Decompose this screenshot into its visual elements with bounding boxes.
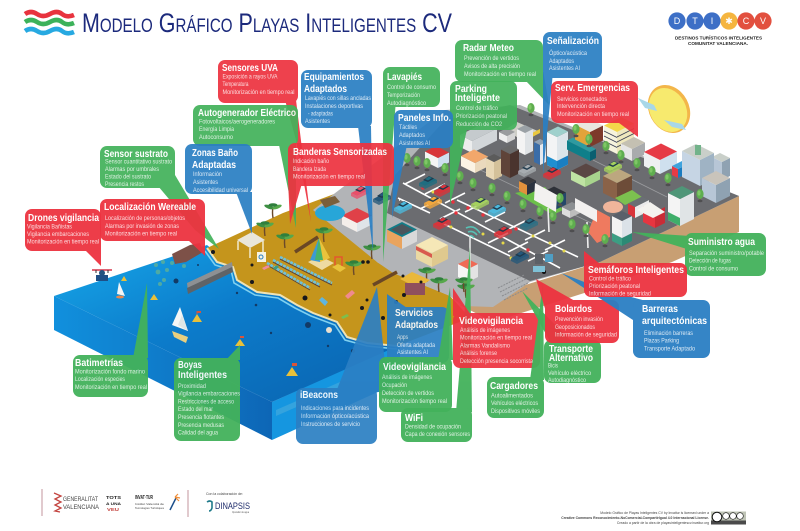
callout: Boyas Inteligentes: Proximidad <box>178 383 206 390</box>
callout: Sensores UVA <box>218 60 311 222</box>
buildings <box>315 117 730 282</box>
callout: Videovigilancia green: Detección de vertidos <box>382 390 434 397</box>
callout: Zonas Baño Adaptadas: Adaptadas <box>192 159 236 171</box>
callout: Localización Wereable: Monitorización en tiempo real <box>105 230 177 238</box>
callout: Sensor sustrato: Estado del sustrato <box>105 174 151 180</box>
callout: Señalización: Señalización <box>547 35 599 47</box>
callout: Parking Inteligente: Control de tráfico <box>456 105 498 112</box>
callout: Autogenerador Eléctrico: Fotovoltaicos/aerogeneradores <box>199 119 275 126</box>
callout: Transporte Alternativo: Vehículo eléctrico <box>548 370 591 377</box>
callout: Equipamientos Adaptados: - adaptadas <box>308 111 333 118</box>
callout: Radar Meteo: Radar Meteo <box>463 42 514 54</box>
callout: Transporte Alternativo: Bicis <box>548 362 558 370</box>
logo: Dinapsis: DINAPSIS <box>215 501 250 511</box>
callout: Sensores UVA: Sensores UVA <box>222 62 278 74</box>
logo: DTI CV: C <box>743 16 750 26</box>
callout: Banderas Sensorizadas: Indicación baño <box>293 158 329 165</box>
parking lines <box>398 160 667 268</box>
callout: Cargadores: Autoalimentados <box>491 392 533 400</box>
cars <box>351 161 622 264</box>
wifi antenna <box>466 227 480 270</box>
footer: institutional logos: GENERALITAT <box>63 496 98 503</box>
callout: Suministro agua: Control de consumo <box>689 266 738 272</box>
callout: Serv. Emergencias: Monitorización en tiempo real <box>557 111 629 118</box>
footer: institutional logos: TOTS <box>106 495 121 500</box>
callout: Equipamientos Adaptados: Lavapiés con sillas ancladas <box>305 95 371 102</box>
callout: Bolardos: Prevención invasión <box>555 316 603 323</box>
callout: Bolardos: Bolardos <box>555 303 592 315</box>
callout: WiFi: Densidad de ocupación <box>405 424 461 430</box>
sunbed rows <box>267 257 332 290</box>
title: Modelo Gráfico Playas Inteligentes CV <box>82 8 452 38</box>
callout: Boyas Inteligentes: Presencia flotantes <box>178 414 224 421</box>
rocks <box>172 243 203 264</box>
beach towels <box>262 265 355 319</box>
callout: Semáforos Inteligentes <box>584 251 687 298</box>
callout: Drones vigilancia <box>25 209 101 266</box>
callout: Zonas Baño Adaptadas: Zonas Baño <box>192 147 238 159</box>
logo: DTI CV: I <box>711 16 713 26</box>
callout: Lavapiés: Control de consumo <box>387 84 436 91</box>
callout: Radar Meteo: Prevención de vertidos <box>464 55 519 62</box>
callout: Radar Meteo <box>455 40 549 105</box>
asphalt parking and roads <box>387 105 739 281</box>
small windsurf <box>116 282 125 298</box>
callout: Videovigilancia green: Ocupación <box>382 382 407 389</box>
callout: Serv. Emergencias: Servicios conectados <box>557 96 607 103</box>
callout: Servicios Adaptados: Apps <box>397 334 408 341</box>
bike rack <box>498 275 528 300</box>
callout: Equipamientos Adaptados: Equipamientos <box>304 71 364 83</box>
callout: Servicios Adaptados: Servicios <box>395 307 433 319</box>
callout: Videovigilancia red: Análisis de imágenes <box>460 327 510 334</box>
callout: Autogenerador Eléctrico: Autogenerador Eléctrico <box>198 107 296 119</box>
callout: Semáforos Inteligentes: Información de seguridad <box>589 290 651 298</box>
parking markers <box>421 186 566 260</box>
callout: Semáforos Inteligentes: Priorización peatonal <box>589 283 640 290</box>
callout: Cargadores: Cargadores <box>490 380 538 392</box>
callout: Videovigilancia red: Videovigilancia <box>459 315 523 327</box>
callout: Boyas Inteligentes: Vigilancia embarcaciones <box>178 390 240 398</box>
callout: Suministro agua: Detección de fugas <box>689 258 731 264</box>
callout: Cargadores <box>487 283 544 418</box>
callout: Cargadores: Dispositivos móviles <box>491 408 540 415</box>
callout: Drones vigilancia: Vigilancia Bañistas <box>27 224 72 230</box>
callout: iBeacons: iBeacons <box>300 389 338 401</box>
callout: Autogenerador Eléctrico: Autoconsumo <box>199 134 233 141</box>
callout: Barreras arquitectónicas: arquitectónicas <box>642 315 707 327</box>
callout: Transporte Alternativo: Transporte <box>549 343 593 355</box>
logo: Generalitat shield <box>54 493 61 512</box>
callout: Transporte Alternativo <box>522 291 601 384</box>
callout: Boyas Inteligentes: Inteligentes <box>178 369 227 381</box>
footer: institutional logos: A UNA <box>106 501 121 506</box>
callout: Localización Wereable <box>100 199 205 256</box>
callout: Videovigilancia green: Videovigilancia <box>383 361 446 373</box>
people on beach <box>211 250 422 320</box>
callout: iBeacons <box>296 287 388 444</box>
callout: Bolardos <box>536 279 619 343</box>
callout: Localización Wereable: Alarmas por invasión de zonas <box>105 223 179 230</box>
callout: Transporte Alternativo: Autodiagnóstico <box>548 377 586 384</box>
callout: Banderas Sensorizadas: Bandera Izada <box>293 166 326 173</box>
callout: Sensores UVA: Temperatura <box>222 81 249 88</box>
callout: Boyas Inteligentes: Boyas <box>178 359 202 371</box>
logo: DTI CV: T <box>692 16 698 26</box>
callout: Drones vigilancia: Drones vigilancia <box>28 212 99 224</box>
trees <box>403 103 704 247</box>
callout: Boyas Inteligentes: Calidad del agua <box>178 430 218 436</box>
palm trees <box>256 203 475 298</box>
logo: DTI CV: COMUNITAT VALENCIANA. <box>688 41 748 47</box>
callout: Banderas Sensorizadas: Banderas Sensorizadas <box>293 146 387 158</box>
callout: Zonas Baño Adaptadas: Accesibilidad universal <box>193 187 248 194</box>
callout: Paneles Info: Táctiles <box>399 124 417 131</box>
logo: Dinapsis: Operador de agua <box>232 510 249 514</box>
callout: Señalización <box>543 32 602 175</box>
callout: iBeacons: Indicaciones para incidentes <box>301 405 369 412</box>
pergola <box>237 232 265 258</box>
callout: Batimetrías: Monitorización en tiempo real <box>75 384 147 391</box>
icon: CC licence badge <box>711 512 746 524</box>
callout: iBeacons: Instrucciones de servicio <box>301 421 360 428</box>
callout: Radar Meteo: Avisos de alta precisión <box>464 63 520 70</box>
callout: Señalización: Asistentes AI <box>549 65 580 72</box>
callout: Servicios Adaptados: Adaptados <box>395 319 438 331</box>
callout: Semáforos Inteligentes: Control de tráfico <box>589 276 631 282</box>
callout: Bolardos: Información de seguridad <box>555 332 617 338</box>
callout: Boyas Inteligentes: Presencia medusas <box>178 422 224 429</box>
callout: Equipamientos Adaptados: Adaptados <box>304 83 347 95</box>
callout: Señalización: Óptico/acústica <box>549 48 587 57</box>
callout: Batimetrías: Localización especies <box>75 376 125 383</box>
callout: Equipamientos Adaptados: Asistentes <box>305 118 330 125</box>
callout: Autogenerador Eléctrico: Energía Limpia <box>199 126 234 133</box>
callout: Drones vigilancia: Monitorización en tiempo real <box>27 238 99 246</box>
icon: sun with clouds <box>638 78 698 140</box>
logo: DTI CV: ✱ <box>725 16 733 26</box>
smart bollards and sensors <box>533 254 553 274</box>
logo: palm mark <box>170 494 180 510</box>
callout: Localización Wereable: Localización Wereable <box>104 201 196 213</box>
callout: Serv. Emergencias: Serv. Emergencias <box>555 82 630 94</box>
footer: institutional logos <box>42 489 250 517</box>
callout: Boyas Inteligentes: Estado del mar <box>178 406 214 413</box>
callout: Semáforos Inteligentes: Semáforos Inteligentes <box>588 264 684 276</box>
footer: institutional logos: Con la colaboración de: <box>206 492 243 496</box>
callout: Parking Inteligente <box>450 81 517 205</box>
footer: institutional logos: INVAT·TUR <box>135 495 153 501</box>
callout: Radar Meteo: Monitorización en tiempo real <box>464 71 536 78</box>
swimmers <box>174 264 355 353</box>
footer: licence text: Modelo Gráfico de Playas Inteligentes CV by Invattur is licensed under a <box>600 511 709 515</box>
callout: Barreras arquitectónicas: Transporte Adaptado <box>644 346 695 352</box>
logo: Dinapsis <box>207 501 250 514</box>
callout: Boyas Inteligentes <box>174 345 240 441</box>
fish cluster <box>154 260 186 286</box>
isometric scene: sea, beach and city <box>54 103 739 440</box>
callout: WiFi: Capa de conexión sensores <box>405 431 470 438</box>
callout: Videovigilancia green: Monitorización tiempo real <box>382 398 447 405</box>
callout: Autogenerador Eléctrico <box>193 105 298 228</box>
callout: Paneles Info: Adaptados <box>399 132 425 139</box>
callout: Videovigilancia red: Detección presencia socorrista <box>460 358 533 365</box>
callout: Batimetrías <box>73 283 148 397</box>
callout: Barreras arquitectónicas: Plazas Parking <box>644 338 679 344</box>
callout: Bolardos: Geoposicionados <box>555 324 595 331</box>
callout: Zonas Baño Adaptadas: Información <box>193 171 222 178</box>
footer: licence text: Creado a partir de la obra de playasinteligentescv.invattur.org <box>617 521 709 525</box>
callout: Barreras arquitectónicas <box>561 273 710 358</box>
footer: institutional logos: VALENCIANA <box>63 504 100 511</box>
callout: Barreras arquitectónicas: Barreras <box>642 303 678 315</box>
callout: Cargadores: Vehículos eléctricos <box>491 400 538 407</box>
callout: Boyas Inteligentes: Restricciones de acceso <box>178 398 234 406</box>
footer: institutional logos: Institut Valencià de <box>135 502 164 506</box>
callout: Servicios Adaptados <box>387 294 449 363</box>
footer: licence text: Creative Commons Reconocimiento-NoComercial-CompartirIgual 4.0 Internacional License. <box>561 516 709 520</box>
callout: iBeacons: Información óptico/acústica <box>301 413 369 420</box>
callout: Sensores UVA: Exposición a rayos UVA <box>222 74 278 80</box>
footer: licence text <box>561 511 709 525</box>
footer: institutional logos: Tecnologies Turístiques <box>135 506 164 510</box>
callout: Parking Inteligente: Inteligente <box>455 92 500 104</box>
callout: Parking Inteligente: Priorización peatonal <box>456 113 507 120</box>
swing <box>332 257 346 272</box>
callout: Videovigilancia red <box>453 288 540 368</box>
callout: Paneles Info: Paneles Info. <box>398 112 451 124</box>
buoys <box>121 276 298 376</box>
callout: Sensor sustrato: Presencia restos <box>105 181 144 188</box>
beach <box>205 190 470 349</box>
drone <box>92 270 112 281</box>
footer: institutional logos: VEU <box>107 507 119 512</box>
callout: Sensor sustrato: Alarmas por umbrales <box>105 166 159 173</box>
kiosk <box>400 272 430 295</box>
callout: Sensor sustrato: Sensor sustrato <box>104 148 168 160</box>
callout: Lavapiés: Lavapiés <box>387 71 422 83</box>
accessibility sign <box>257 252 266 262</box>
callout: Localización Wereable: Localización de personas/objetos <box>105 215 185 222</box>
callout: Suministro agua: Separación suministro/potable <box>689 250 764 257</box>
callout: Videovigilancia red: Monitorización en tiempo real <box>460 334 532 342</box>
sailboat <box>172 307 188 343</box>
callout: Zonas Baño Adaptadas <box>185 144 252 234</box>
callout: Barreras arquitectónicas: Eliminación barreras <box>644 330 693 337</box>
callout: Videovigilancia green: Análisis de imágenes <box>382 374 432 381</box>
callout: Equipamientos Adaptados: Instalaciones deportivas <box>305 103 363 110</box>
callout: Sensor sustrato: Sensor cuantitativo sustrato <box>105 158 172 166</box>
callout: Transporte Alternativo: Alternativo <box>549 352 593 364</box>
callout: Lavapiés: Temporización <box>387 92 420 99</box>
tent <box>308 238 334 270</box>
logo: DTI CV: D <box>674 16 681 26</box>
callout: Suministro agua <box>632 232 766 276</box>
callout: Señalización: Adaptados <box>549 58 574 65</box>
tan earth side <box>460 196 739 322</box>
callout: Batimetrías: Monitorización fondo marino <box>75 368 145 376</box>
callout: Drones vigilancia: Vigilancia embarcaciones <box>27 231 89 238</box>
callout: Serv. Emergencias: Intervención directa <box>557 103 605 110</box>
logo: DTI CV: V <box>760 16 766 26</box>
callout: Equipamientos Adaptados <box>301 70 373 252</box>
callout: Videovigilancia red: Alarmas Vandalismo <box>460 342 510 350</box>
callout: Sensores UVA: Monitorización en tiempo real <box>222 89 294 96</box>
sea block <box>54 245 400 440</box>
callout: Videovigilancia red: Análisis forense <box>460 350 497 357</box>
callout: Paneles Info: Asistentes AI <box>399 140 430 147</box>
callout: Parking Inteligente: Parking <box>455 83 487 95</box>
callout: Paneles Info <box>392 110 453 218</box>
callout: Servicios Adaptados: Oferta adaptada <box>397 342 435 349</box>
callout: Banderas Sensorizadas: Monitorización en tiempo real <box>293 174 365 180</box>
callout: WiFi: WiFi <box>405 412 423 424</box>
callout: Sensor sustrato <box>100 146 219 249</box>
logo: DTI CV: DESTINOS TURÍSTICOS INTELIGENTES <box>675 34 763 42</box>
callout: Parking Inteligente: Reducción de CO2 <box>456 121 502 128</box>
callout: Serv. Emergencias <box>551 81 638 137</box>
title logo: waves <box>25 12 74 33</box>
callout: Servicios Adaptados: Asistentes AI <box>397 349 428 356</box>
callout: WiFi <box>401 247 472 442</box>
wooden walkways <box>295 237 397 285</box>
callout: Suministro agua: Suministro agua <box>688 236 755 248</box>
callout: Batimetrías: Batimetrías <box>75 357 123 369</box>
callout: Lavapiés <box>383 67 440 262</box>
breakwater <box>187 262 233 294</box>
callout: Banderas Sensorizadas <box>288 143 394 224</box>
callout: Zonas Baño Adaptadas: Asistentes <box>193 179 218 186</box>
callout: Lavapiés: Autodiagnóstico <box>387 100 426 107</box>
callout: Videovigilancia green <box>379 287 453 412</box>
logo: DTI CV <box>668 12 772 47</box>
city pavement <box>313 105 739 307</box>
